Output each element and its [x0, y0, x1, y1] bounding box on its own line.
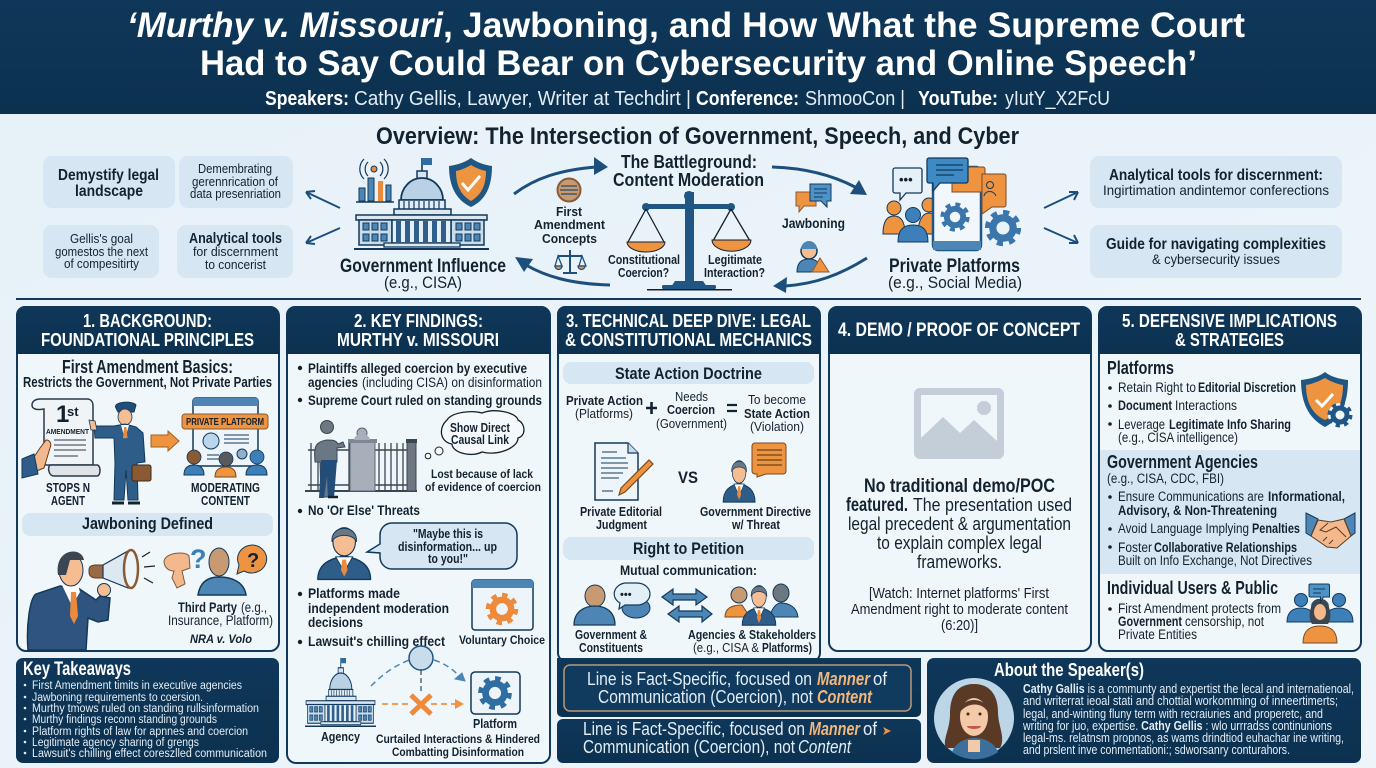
- speaker biography: writing for juo, expertise. Cathy Gellis : wlo urrradss continunions: [1022, 719, 1332, 733]
- label: agencies and stakeholders: [688, 628, 816, 655]
- label: third party: Insurance, Platform): [168, 612, 273, 628]
- takeaway bullets: First Amendment timits in executive agencies: [32, 680, 242, 692]
- equation: private action: (Platforms): [575, 406, 633, 421]
- icon: government official: [723, 461, 755, 502]
- goal box: demystify: [43, 156, 175, 208]
- icon: stakeholders group: [725, 584, 798, 625]
- icon: social media platforms: •••: [899, 172, 913, 187]
- label: stops agent: AGENT: [51, 493, 85, 508]
- first amendment basics heading: Restricts the Government, Not Private Parties: [23, 375, 272, 391]
- section: platforms: [1107, 358, 1296, 445]
- section: individual users: Private Entities: [1118, 627, 1197, 642]
- panel 5 heading: [1122, 310, 1337, 350]
- takeaway bullets: Lawsuit's chilling effect coreszlled communication: [32, 748, 267, 760]
- icon: social media platforms: [883, 158, 1018, 250]
- label: private platforms: [888, 255, 1022, 292]
- callout: line is fact-specific (plain): [557, 718, 921, 763]
- arrow: orange: [151, 431, 179, 451]
- finding: independent moderation: Platforms made: [308, 585, 400, 601]
- label: government directive: w/ Threat: [731, 518, 781, 532]
- label: private editorial judgment: Private Editorial: [580, 505, 662, 519]
- speaker line: yIutY_X2FcU: [1005, 88, 1110, 110]
- finding: plaintiffs and standing: agencies: [308, 375, 358, 390]
- equation: needs coercion: Coercion: [667, 402, 715, 417]
- panel 1 heading: FOUNDATIONAL PRINCIPLES: [41, 329, 254, 350]
- title: , Jawboning, and How What the Supreme Court: [443, 6, 1245, 45]
- about the speaker panel: [927, 658, 1361, 763]
- callout: line is fact-specific (plain): of: [863, 718, 878, 739]
- takeaway bullets: [24, 680, 267, 760]
- first amendment concepts: Concepts: [542, 231, 597, 246]
- label: curtailed interactions: [376, 734, 540, 759]
- goal box: demystify: Demystify legal: [58, 167, 159, 184]
- speaker line: Speakers:: [265, 88, 349, 110]
- icon: orange speech bubble: [752, 443, 786, 477]
- goal box: gellis's goal: Gellis's goal: [70, 231, 133, 246]
- equation: needs coercion: [656, 389, 727, 431]
- goal box: gellis's goal: [43, 225, 159, 278]
- panel 4 heading: 4. DEMO / PROOF OF CONCEPT: [838, 319, 1080, 341]
- speaker biography: [1022, 682, 1354, 757]
- callout: line is fact-specific (plain): Content: [798, 736, 852, 757]
- callout: line is fact-specific (outlined): Line is Fact-Specific, focused on: [587, 668, 812, 689]
- first amendment concepts: First: [556, 204, 583, 219]
- panel 1: background: [16, 306, 279, 651]
- goal box: gellis's goal: gomestos the next: [55, 244, 148, 259]
- text: no traditional demo: legal precedent & argumentation: [848, 513, 1071, 534]
- label: curtailed interactions: Curtailed Interactions & Hindered: [376, 734, 540, 746]
- speaker line: [265, 88, 1110, 110]
- text: no traditional demo: [846, 475, 1072, 572]
- label: government influence: Government Influence: [340, 255, 506, 277]
- icon: government capitol: [354, 158, 492, 250]
- panel 3 heading: 3. TECHNICAL DEEP DIVE: LEGAL: [566, 310, 811, 331]
- icon: private platform window: [182, 398, 268, 477]
- icon: radio tower bars: [356, 159, 394, 202]
- text: watch reference: [Watch: Internet platforms' First: [869, 585, 1050, 602]
- label: government and constituents: [575, 628, 647, 655]
- section: platforms: Retain Right to: [1118, 380, 1196, 395]
- label: moderating content: [191, 480, 260, 508]
- callout: line is fact-specific (outlined): of: [873, 668, 888, 689]
- callout: line is fact-specific (plain): Communication (Coercion), not: [583, 736, 795, 757]
- label: curtailed interactions: Combatting Disinformation: [392, 747, 524, 759]
- state action doctrine band: State Action Doctrine: [615, 364, 762, 383]
- callout: line is fact-specific (plain): Line is Fact-Specific, focused on: [583, 718, 805, 739]
- icon: voluntary choice window: [459, 580, 545, 647]
- section: government agencies: Informational,: [1268, 489, 1345, 504]
- label: NRA v. Volo: NRA v. Volo: [190, 632, 252, 646]
- label: lost because of lack of evidence: [425, 467, 541, 494]
- thought bubble: show direct causal link: Causal Link: [451, 433, 509, 447]
- icon: constituent with bubbles: •••: [620, 589, 632, 601]
- icon: official speaking: [318, 528, 371, 579]
- icon: document and pencil: [595, 443, 653, 500]
- text: no traditional demo: frameworks.: [917, 551, 1002, 572]
- goal box: analytical tools: to concerist: [205, 257, 266, 272]
- takeaway bullets: Murthy tmows ruled on standing rullsinformation: [32, 703, 259, 715]
- section: individual users: First Amendment protects from: [1118, 601, 1281, 616]
- label: lost because of lack of evidence: Lost because of lack: [431, 467, 533, 481]
- icon: image placeholder: [914, 388, 1004, 459]
- panel 2 heading: 2. KEY FINDINGS:: [354, 310, 483, 331]
- callout: line is fact-specific (outlined): [557, 658, 921, 717]
- equation: needs coercion: Needs: [675, 389, 708, 404]
- box: analytical tools for discernment: Analytical tools for discernment:: [1109, 167, 1323, 184]
- label: private platforms: (e.g., Social Media): [888, 273, 1022, 292]
- panel 1 heading: 1. BACKGROUND:: [83, 310, 212, 331]
- jawboning defined band: Jawboning Defined: [82, 514, 213, 533]
- panel 3 heading: [565, 310, 812, 350]
- goal box: analytical tools: for discernment: [193, 244, 278, 259]
- title: ‘Murthy v. Missouri: [127, 6, 444, 45]
- thought bubble: show direct causal link: Show Direct: [450, 421, 511, 435]
- equation: state action: [744, 392, 810, 434]
- right to petition band: [563, 537, 814, 560]
- finding: independent moderation: decisions: [308, 614, 363, 630]
- panel 1 heading: [41, 310, 254, 350]
- equation: private action: [566, 393, 643, 421]
- text: no traditional demo: featured.: [846, 494, 908, 516]
- arrows to right boxes: [1044, 192, 1078, 243]
- scale label: constitutional coercion: [608, 253, 680, 280]
- label: private platforms: Private Platforms: [889, 255, 1020, 277]
- panel 2 heading: MURTHY v. MISSOURI: [337, 329, 499, 350]
- speech bubble: maybe this is disinformation: disinformation... up: [398, 540, 497, 554]
- section: government agencies: Advisory, & Non-Threatening: [1118, 503, 1277, 518]
- equation: state action: To become: [748, 392, 806, 407]
- text: no traditional demo: No traditional demo/POC: [864, 475, 1055, 497]
- icon: shield check: [449, 158, 492, 207]
- section: platforms: Legitimate Info Sharing: [1169, 417, 1291, 432]
- speaker line: Conference:: [696, 88, 799, 110]
- icon: voluntary choice window: Voluntary Choice: [459, 633, 545, 647]
- box: guide for navigating complexities: & cybersecurity issues: [1152, 251, 1280, 267]
- label: agencies and stakeholders: Agencies & Stakeholders: [688, 628, 816, 642]
- panel 5: defensive implications: [1098, 306, 1361, 651]
- speech bubble: maybe this is disinformation: [367, 523, 517, 569]
- text: no traditional demo: to explain complex legal: [877, 532, 1042, 553]
- equation: state action: (Violation): [750, 419, 804, 434]
- scale label: constitutional coercion: Coercion?: [618, 266, 669, 280]
- label: government directive: [700, 505, 811, 532]
- callout: line is fact-specific (plain): Manner: [809, 718, 861, 739]
- label: government directive: Government Directive: [700, 505, 811, 519]
- arrow: battleground to platforms: [772, 167, 867, 195]
- speech bubble: maybe this is disinformation: "Maybe this is: [413, 527, 483, 541]
- label: government influence: (e.g., CISA): [384, 273, 462, 292]
- first amendment basics heading: First Amendment Basics:: [62, 357, 233, 377]
- finding: plaintiffs and standing: [298, 361, 542, 408]
- takeaway bullets: Platform rights of law for apnnes and coercion: [32, 726, 248, 738]
- thought bubble: show direct causal link: [425, 411, 524, 459]
- label: lost because of lack of evidence: of evidence of coercion: [425, 480, 541, 494]
- finding: independent moderation: [298, 585, 449, 649]
- panel 5 heading: & STRATEGIES: [1175, 329, 1284, 350]
- icon: third party person: [198, 545, 267, 595]
- panel 3 heading: & CONSTITUTIONAL MECHANICS: [565, 329, 812, 350]
- first amendment concepts: [534, 178, 606, 273]
- icon: platform box: Platform: [473, 717, 517, 731]
- state action doctrine band: [563, 362, 814, 384]
- icon: two way arrows: [662, 589, 712, 622]
- panel 4: demo / proof of concept: [828, 306, 1091, 651]
- section: government agencies: Ensure Communications are: [1118, 489, 1264, 504]
- icon: hand and question: ?: [190, 544, 206, 574]
- label: moderating content: CONTENT: [201, 493, 250, 508]
- takeaway bullets: Legitimate agency sharing of grengs: [32, 737, 199, 749]
- section: government agencies: (e.g., CISA, CDC, FBI): [1107, 471, 1224, 486]
- box: guide for navigating complexities: Guide for navigating complexities: [1106, 236, 1326, 253]
- equation: state action: State Action: [744, 406, 810, 421]
- goal box: demembrating: Demembrating: [198, 162, 272, 176]
- first amendment concepts: Amendment: [534, 217, 606, 232]
- label: private editorial judgment: Judgment: [596, 518, 648, 532]
- icon: scales of justice: [627, 191, 751, 290]
- equation: needs coercion: (Government): [656, 416, 727, 431]
- section: platforms: Interactions: [1175, 398, 1237, 413]
- callout: line is fact-specific (outlined): Content: [817, 686, 873, 707]
- section: individual users: [1107, 578, 1281, 642]
- scale label: constitutional coercion: Constitutional: [608, 253, 680, 267]
- goal box: demembrating: [179, 156, 293, 208]
- goal box: demystify: landscape: [75, 183, 143, 200]
- goal box: demembrating: gerennrication of: [192, 175, 278, 189]
- arrows to left boxes: [306, 191, 340, 244]
- label: mutual communication: Mutual communication:: [620, 563, 757, 578]
- section: government agencies: Collaborative Relationships: [1154, 540, 1297, 555]
- text: watch reference: Amendment right to moderate content: [851, 601, 1069, 618]
- goal box: analytical tools: Analytical tools: [189, 231, 282, 247]
- section: platforms: Platforms: [1107, 358, 1174, 378]
- arrow: battleground to government: [515, 257, 610, 285]
- icon: handshake: [1306, 513, 1355, 548]
- scale label: legitimate interaction: [704, 253, 765, 280]
- label: agencies and stakeholders: (e.g., CISA &: [693, 641, 760, 655]
- label: stops agent: STOPS N: [46, 480, 90, 495]
- label: government influence: [340, 255, 506, 292]
- label: agencies and stakeholders: Platforms): [762, 641, 812, 655]
- takeaway bullets: Jawboning requirements to coersion.: [32, 692, 203, 704]
- label: vs: VS: [678, 468, 698, 487]
- finding: plaintiffs and standing: Plaintiffs alleged coercion by executive: [308, 361, 527, 376]
- right to petition band: Right to Petition: [633, 539, 744, 558]
- callout: line is fact-specific (outlined): Manner: [817, 668, 871, 689]
- label: third party: (e.g.,: [241, 599, 267, 615]
- section: individual users: Government: [1118, 614, 1182, 629]
- panel 2: key findings: [286, 306, 550, 763]
- section: platforms: (e.g., CISA intelligence): [1118, 430, 1238, 445]
- icon: amendment scroll: [22, 399, 100, 478]
- goal box: analytical tools: [177, 225, 293, 278]
- section: platforms: Leverage: [1118, 417, 1165, 432]
- jawboning icon and label: Jawboning: [782, 216, 845, 231]
- speaker portrait: [934, 678, 1014, 759]
- icon: platform box: [471, 672, 520, 731]
- box: analytical tools for discernment: Ingirtimation andintemor conferections: [1103, 182, 1329, 198]
- label: third party: Third Party: [178, 599, 237, 615]
- section: government agencies: Penalties: [1252, 521, 1300, 536]
- section: government agencies: Foster: [1118, 540, 1152, 555]
- jawboning defined band: [22, 513, 273, 536]
- icon: private platform window: PRIVATE PLATFORM: [186, 417, 264, 428]
- arrow: government to battleground: [514, 157, 608, 194]
- finding: independent moderation: Lawsuit's chilling effect: [308, 633, 445, 649]
- section: platforms: Editorial Discretion: [1198, 380, 1296, 395]
- key takeaways panel: Key Takeaways: [23, 659, 131, 680]
- speaker biography: and writerrat ieoal stati and chottial workomming of inneertimerts;: [1023, 694, 1338, 708]
- speaker biography: and prslent inve conmentationi:; sdworsanry conturahors.: [1023, 743, 1290, 757]
- icon: agency building: [305, 658, 376, 727]
- equation: plus: [646, 402, 657, 414]
- speaker line: Cathy Gellis, Lawyer, Writer at Techdirt |: [354, 88, 691, 110]
- text: no traditional demo: The presentation used: [913, 494, 1072, 515]
- panel 3: technical deep dive: [557, 306, 820, 661]
- section: government agencies: [1107, 452, 1345, 568]
- speaker line: YouTube:: [918, 88, 998, 110]
- takeaway bullets: Murthy findings reconn standing grounds: [32, 714, 217, 726]
- finding: plaintiffs and standing: (including CISA) on disinformation: [362, 375, 542, 390]
- label: stops agent: [46, 480, 90, 508]
- icon: users with speech bubble: [1287, 584, 1353, 643]
- goal box: demembrating: data presenriation: [190, 187, 281, 201]
- title: [127, 6, 1245, 83]
- title: Had to Say Could Bear on Cybersecurity and Online Speech’: [200, 44, 1197, 83]
- text: watch reference: (6:20)]: [941, 617, 978, 634]
- label: government and constituents: Constituents: [579, 641, 643, 655]
- finding: independent moderation: independent moderation: [308, 600, 449, 616]
- box: analytical tools for discernment: [1090, 156, 1342, 208]
- section: government agencies: Avoid Language Implying: [1118, 521, 1249, 536]
- jawboning icon and label: [782, 184, 845, 231]
- arrow: platforms to battleground: [773, 258, 867, 293]
- panel 2 heading: [337, 310, 499, 350]
- label: third party: [168, 599, 273, 628]
- section: individual users: Individual Users & Public: [1107, 578, 1278, 598]
- finding: no or else threats: No 'Or Else' Threats: [308, 503, 420, 518]
- icon: third party person: ?: [247, 550, 259, 572]
- icon: hand and question: [164, 544, 206, 588]
- icon: small scales: [555, 250, 586, 273]
- section: government agencies: Government Agencies: [1107, 452, 1258, 472]
- section: individual users: censorship, not: [1185, 614, 1264, 629]
- icon: amendment scroll: 1: [56, 401, 69, 428]
- icon: amendment scroll: st: [67, 404, 79, 419]
- battleground heading: Content Moderation: [613, 170, 764, 190]
- icon: man at court fence: [305, 420, 417, 498]
- box: guide for navigating complexities: [1090, 225, 1342, 278]
- label: government and constituents: Government &: [575, 628, 647, 642]
- scale label: legitimate interaction: Interaction?: [704, 266, 765, 280]
- icon: agent with briefcase: [89, 402, 151, 503]
- equation: private action: Private Action: [566, 393, 643, 408]
- speech bubble: maybe this is disinformation: to you!": [428, 552, 468, 566]
- overview heading: Overview: The Intersection of Government, Speech, and Cyber: [376, 123, 1019, 150]
- scale label: legitimate interaction: Legitimate: [708, 253, 762, 267]
- icon: man with megaphone: [27, 550, 155, 650]
- icon: amendment scroll: AMENDMENT: [46, 427, 89, 436]
- key takeaways panel: [16, 658, 279, 763]
- label: private editorial judgment: [580, 505, 662, 532]
- battleground heading: [613, 152, 764, 190]
- callout: line is fact-specific (outlined): Communication (Coercion), not: [598, 686, 813, 707]
- text: watch reference: [851, 585, 1069, 634]
- battleground heading: The Battleground:: [621, 152, 757, 172]
- label: moderating content: MODERATING: [191, 480, 260, 495]
- icon: shield with gear: [1301, 372, 1352, 427]
- equation: equals: [727, 405, 737, 411]
- finding: plaintiffs and standing: Supreme Court ruled on standing grounds: [308, 393, 542, 408]
- panel 5 heading: 5. DEFENSIVE IMPLICATIONS: [1122, 310, 1337, 331]
- icon: person with warning: [797, 241, 829, 272]
- label: agency: Agency: [321, 730, 360, 744]
- speaker line: ShmooCon |: [805, 88, 905, 110]
- header banner: [0, 0, 1376, 114]
- goal box: gellis's goal: of compesitirty: [64, 256, 139, 271]
- icon: constituent with bubbles: [574, 583, 650, 625]
- first amendment basics heading: [23, 357, 272, 391]
- diagram: curtailed flow: [371, 646, 465, 714]
- section: platforms: Document: [1118, 398, 1172, 413]
- section: government agencies: Built on Info Exchange, Not Directives: [1118, 553, 1312, 568]
- speaker biography: legal, and-winting fluny term with recraiuries and properetc, and: [1023, 707, 1323, 721]
- about the speaker panel: About the Speaker(s): [994, 660, 1144, 680]
